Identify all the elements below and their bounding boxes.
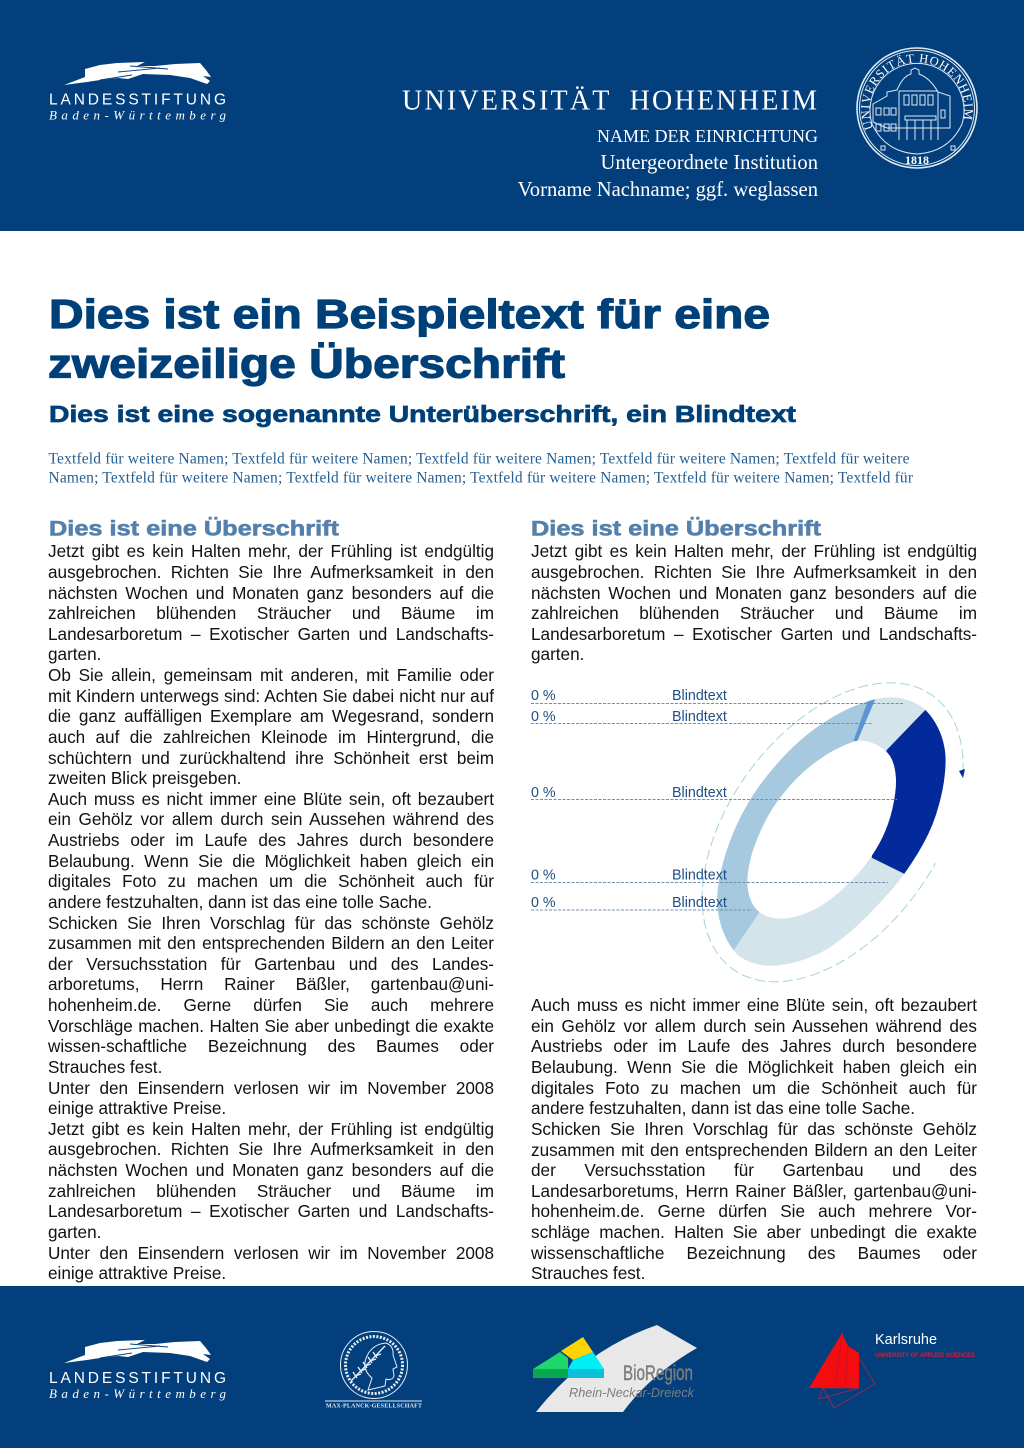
left column body text: Auch muss es nicht immer eine Blüte sein, oft bezaubert bbox=[48, 789, 494, 809]
university name: UNIVERSITÄT HOHENHEIM bbox=[402, 86, 817, 116]
right column body text, upper block: ausgebrochen. Richten Sie Ihre Aufmerksamkeit in den bbox=[531, 562, 977, 582]
logo: Karlsruhe University of Applied Sciences: Karlsruhe bbox=[875, 1331, 937, 1348]
dashed rotation arrow arc bbox=[702, 683, 963, 982]
logo: Max-Planck-Gesellschaft: MAX-PLANCK-GESELLSCHAFT bbox=[326, 1404, 422, 1410]
left column body text: ausgebrochen. Richten Sie Ihre Aufmerksamkeit in den bbox=[48, 1139, 494, 1159]
right column body text, upper block: nächsten Wochen und Monaten ganz besonders auf die bbox=[531, 583, 977, 603]
chart legend rows: Blindtext bbox=[672, 688, 727, 704]
sub institution: Untergeordnete Institution bbox=[600, 152, 818, 174]
left column body text: hohenheim.de. Gerne dürfen Sie auch mehrere bbox=[48, 995, 494, 1015]
right column body text, lower block: hohenheim.de. Gerne dürfen Sie auch mehrere Vor- bbox=[531, 1201, 977, 1221]
left column body text: zweiten Blick preisgeben. bbox=[48, 768, 241, 788]
seal: Universität Hohenheim: UNIVERSITÄT HOHENHEIM bbox=[861, 54, 973, 131]
logo: Max-Planck-Gesellschaft bbox=[325, 1332, 422, 1410]
left column body text: Landesarboretum – Exotischer Garten und Landschafts- bbox=[48, 624, 494, 644]
seal: Universität Hohenheim bbox=[856, 47, 978, 169]
left column body text: andere festzuhalten, dann ist das eine tolle Sache. bbox=[48, 892, 432, 912]
right column body text, lower block: wissenschaftliche Bezeichnung des Baumes oder bbox=[531, 1243, 977, 1263]
chart legend rows: 0 % bbox=[531, 868, 556, 884]
left column body text: arboretums, Herrn Rainer Bäßler, gartenbau@uni- bbox=[48, 974, 494, 994]
chart legend rows: 0 % bbox=[531, 785, 556, 801]
arrow head bbox=[959, 769, 965, 778]
author name: Vorname Nachname; ggf. weglassen bbox=[518, 179, 818, 201]
left column body text: nächsten Wochen und Monaten ganz besonders auf die bbox=[48, 583, 494, 603]
left column body text: ausgebrochen. Richten Sie Ihre Aufmerksamkeit in den bbox=[48, 562, 494, 582]
logo: BioRegion Rhein-Neckar-Dreieck: BioRegion bbox=[623, 1362, 693, 1385]
subtitle: Dies ist eine sogenannte Unterüberschrift, ein Blindtext bbox=[49, 401, 796, 427]
logo: Landesstiftung footer bbox=[49, 1340, 226, 1401]
left column body text: Austriebs oder im Laufe des Jahres durch besondere bbox=[48, 830, 494, 850]
left column body text: zahlreichen blühenden Sträucher und Bäume im bbox=[48, 603, 494, 623]
right column body text, lower block: andere festzuhalten, dann ist das eine tolle Sache. bbox=[531, 1098, 915, 1118]
left column body text: garten. bbox=[48, 644, 101, 664]
chart legend rows: 0 % bbox=[531, 709, 556, 725]
left column body text: Vorschläge machen. Halten Sie aber unbedingt die exakte bbox=[48, 1016, 494, 1036]
logo: Landesstiftung footer: LANDESSTIFTUNG bbox=[49, 1370, 226, 1387]
right column body text, upper block: zahlreichen blühenden Sträucher und Bäume im bbox=[531, 603, 977, 623]
chart legend rows: Blindtext bbox=[672, 868, 727, 884]
left column body text: mit Kindern unterwegs sind: Achten Sie dabei nicht nur auf bbox=[48, 686, 494, 706]
left column body text: Belaubung. Wenn Sie die Möglichkeit haben gleich ein bbox=[48, 851, 494, 871]
right section heading: Dies ist eine Überschrift bbox=[531, 516, 821, 541]
right column body text, lower block: Austriebs oder im Laufe des Jahres durch besondere bbox=[531, 1036, 977, 1056]
right column body text, lower block: der Versuchsstation für Gartenbau und des bbox=[531, 1160, 977, 1180]
right column body text, lower block bbox=[531, 995, 977, 1283]
left column body text: schüchtern und zurückhaltend ihre Schönheit erst beim bbox=[48, 748, 494, 768]
names text field: Namen; Textfeld für weitere Namen; Textfeld für weitere Namen; Textfeld für weitere Namen; Textfeld für weitere Namen; Textfeld für bbox=[48, 469, 914, 486]
left column body text: zusammen mit den entsprechenden Bildern an den Leiter bbox=[48, 933, 494, 953]
left column body text: der Versuchsstation für Gartenbau und des Landes- bbox=[48, 954, 494, 974]
left column body text: zahlreichen blühenden Sträucher und Bäume im bbox=[48, 1181, 494, 1201]
header band bbox=[0, 0, 1024, 231]
left column body text: Ob Sie allein, gemeinsam mit anderen, mit Familie oder bbox=[48, 665, 494, 685]
left column body text: Jetzt gibt es kein Halten mehr, der Frühling ist endgültig bbox=[48, 1119, 494, 1139]
right column body text, lower block: Belaubung. Wenn Sie die Möglichkeit haben gleich ein bbox=[531, 1057, 977, 1077]
right column body text, lower block: Schicken Sie Ihren Vorschlag für das schönste Gehölz bbox=[531, 1119, 977, 1139]
right column body text, upper block: garten. bbox=[531, 644, 584, 664]
left column body text: garten. bbox=[48, 1222, 101, 1242]
left column body text: auch auf die zahlreichen Kleinode im Hintergrund, die bbox=[48, 727, 494, 747]
left column body text: Schicken Sie Ihren Vorschlag für das schönste Gehölz bbox=[48, 913, 494, 933]
names text field bbox=[48, 450, 914, 486]
right column body text, lower block: Strauches fest. bbox=[531, 1263, 645, 1283]
logo: Landesstiftung header: Baden-Württemberg bbox=[49, 108, 226, 122]
left column body text: die ganz auffälligen Exemplare am Wegesrand, sondern bbox=[48, 706, 494, 726]
donut segments bbox=[717, 697, 946, 966]
chart legend rows: Blindtext bbox=[672, 785, 727, 801]
footer band bbox=[0, 1286, 1024, 1448]
logo: Landesstiftung header bbox=[49, 62, 226, 122]
left column body text: ein Gehölz vor allem durch sein Aussehen während des bbox=[48, 809, 494, 829]
chart legend rows: 0 % bbox=[531, 895, 556, 911]
title bbox=[48, 291, 770, 386]
left column body text: einige attraktive Preise. bbox=[48, 1263, 226, 1283]
chart legend rows: 0 % bbox=[531, 688, 556, 704]
institution name: NAME DER EINRICHTUNG bbox=[597, 126, 818, 146]
left column body text: Unter den Einsendern verlosen wir im November 2008 bbox=[48, 1078, 494, 1098]
logo: Landesstiftung header: LANDESSTIFTUNG bbox=[49, 92, 226, 108]
right column body text, lower block: Landesarboretums, Herrn Rainer Bäßler, gartenbau@uni- bbox=[531, 1181, 977, 1201]
right column body text, lower block: schläge machen. Halten Sie aber unbedingt die exakte bbox=[531, 1222, 977, 1242]
logo: BioRegion Rhein-Neckar-Dreieck: Rhein-Neckar-Dreieck bbox=[569, 1385, 695, 1400]
logo: Karlsruhe University of Applied Sciences: UNIVERSITY OF APPLIED SCIENCES bbox=[875, 1353, 975, 1359]
names text field: Textfeld für weitere Namen; Textfeld für weitere Namen; Textfeld für weitere Namen; Textfeld für weitere Namen; Textfeld für weitere bbox=[48, 450, 910, 467]
left column body text: einige attraktive Preise. bbox=[48, 1098, 226, 1118]
right column body text, upper block: Jetzt gibt es kein Halten mehr, der Frühling ist endgültig bbox=[531, 541, 977, 561]
right column body text, lower block: Auch muss es nicht immer eine Blüte sein, oft bezaubert bbox=[531, 995, 977, 1015]
seal: Universität Hohenheim: 1818 bbox=[905, 153, 929, 167]
left column body text: digitales Foto zu machen um die Schönheit auch für bbox=[48, 871, 494, 891]
donut chart bbox=[702, 682, 965, 982]
right column body text, upper block: Landesarboretum – Exotischer Garten und Landschafts- bbox=[531, 624, 977, 644]
logo: Landesstiftung footer: Baden-Württemberg bbox=[49, 1386, 226, 1401]
left column body text: wissen-schaftliche Bezeichnung des Baumes oder bbox=[48, 1036, 494, 1056]
right column body text, lower block: digitales Foto zu machen um die Schönheit auch für bbox=[531, 1078, 977, 1098]
left column body text: nächsten Wochen und Monaten ganz besonders auf die bbox=[48, 1160, 494, 1180]
title: zweizeilige Überschrift bbox=[48, 340, 565, 386]
left column body text: Jetzt gibt es kein Halten mehr, der Frühling ist endgültig bbox=[48, 541, 494, 561]
logo: Karlsruhe University of Applied Sciences bbox=[809, 1331, 975, 1408]
chart legend rows bbox=[531, 688, 903, 911]
logo: BioRegion Rhein-Neckar-Dreieck bbox=[533, 1325, 697, 1412]
right column body text, upper block bbox=[531, 541, 977, 664]
left column body text: Unter den Einsendern verlosen wir im November 2008 bbox=[48, 1243, 494, 1263]
chart legend rows: Blindtext bbox=[672, 895, 727, 911]
left section heading: Dies ist eine Überschrift bbox=[49, 516, 339, 541]
title: Dies ist ein Beispieltext für eine bbox=[49, 291, 770, 337]
right column body text, lower block: ein Gehölz vor allem durch sein Aussehen während des bbox=[531, 1016, 977, 1036]
left column body text: Landesarboretum – Exotischer Garten und Landschafts- bbox=[48, 1201, 494, 1221]
left column body text bbox=[48, 541, 494, 1283]
right column body text, lower block: zusammen mit den entsprechenden Bildern an den Leiter bbox=[531, 1140, 977, 1160]
chart legend rows: Blindtext bbox=[672, 709, 727, 725]
left column body text: Strauches fest. bbox=[48, 1057, 162, 1077]
